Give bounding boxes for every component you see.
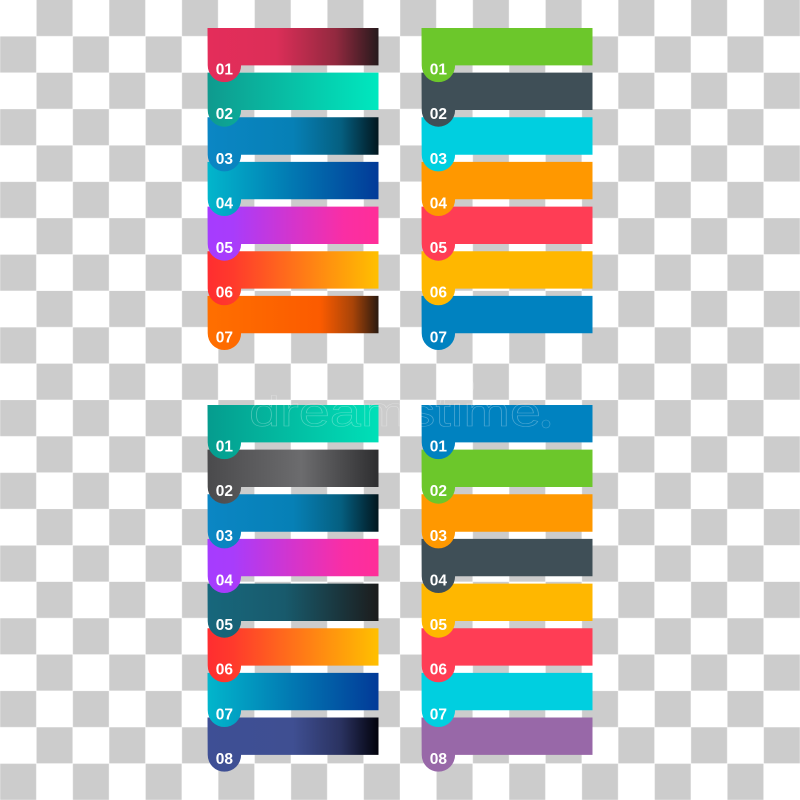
banner 07: 07 — [216, 329, 233, 346]
banner 01: 01 — [216, 62, 233, 78]
banner 02: 02 — [430, 106, 447, 123]
banner 05 — [422, 207, 592, 261]
banner 01 — [422, 405, 592, 459]
banner 04: 04 — [216, 572, 233, 589]
banner 07 — [422, 673, 592, 727]
banner 06 — [208, 251, 378, 305]
banner 04: 04 — [430, 195, 447, 212]
banner 04 — [208, 162, 378, 216]
banner 03 — [208, 117, 378, 171]
banner 08: 08 — [430, 751, 447, 768]
banner 01: 01 — [430, 438, 447, 456]
banner 06: 06 — [430, 285, 447, 302]
banner 07 — [422, 296, 592, 350]
banner 06 — [208, 628, 378, 682]
banner 07: 07 — [216, 706, 233, 723]
banner 06 — [422, 251, 592, 305]
panel: gradient banners 01-08 — [208, 405, 378, 772]
banner 01 — [208, 405, 378, 459]
banner 05: 05 — [430, 617, 447, 634]
banner 05: 05 — [216, 617, 233, 634]
banner 03: 03 — [430, 151, 447, 168]
banner 01: 01 — [430, 62, 447, 78]
banner 04 — [208, 539, 378, 593]
watermark — [249, 374, 550, 435]
banner 04: 04 — [216, 195, 233, 212]
banner 02: 02 — [216, 106, 233, 123]
banner 07 — [208, 296, 378, 350]
banner 02: 02 — [216, 483, 233, 500]
banner 03 — [422, 117, 592, 171]
banner 05: 05 — [216, 240, 233, 257]
banner 04 — [422, 539, 592, 593]
panel: flat banners 01-07 — [422, 28, 592, 350]
banner 08 — [422, 718, 592, 772]
banner 05 — [422, 584, 592, 638]
banner 02 — [422, 450, 592, 504]
banner 06 — [422, 628, 592, 682]
banner 06: 06 — [430, 662, 447, 679]
banner 01: 01 — [216, 438, 233, 456]
banner 03: 03 — [216, 528, 233, 545]
banner 08 — [208, 718, 378, 772]
banner 06: 06 — [216, 662, 233, 679]
panel: gradient banners 01-07 — [208, 28, 378, 350]
banner 02 — [208, 73, 378, 127]
banner 05 — [208, 207, 378, 261]
banner 07 — [208, 673, 378, 727]
banner 01 — [422, 28, 592, 82]
banner 03: 03 — [430, 528, 447, 545]
banner 02 — [208, 450, 378, 504]
banner 03 — [208, 494, 378, 548]
banner 03: 03 — [216, 151, 233, 168]
banner 07: 07 — [430, 329, 447, 346]
banner 07: 07 — [430, 706, 447, 723]
banner 01 — [208, 28, 378, 82]
banner 03 — [422, 494, 592, 548]
banner 05 — [208, 584, 378, 638]
banner 04 — [422, 162, 592, 216]
banner 06: 06 — [216, 285, 233, 302]
panel: flat banners 01-08 — [422, 405, 592, 772]
banner 04: 04 — [430, 572, 447, 589]
banner 02: 02 — [430, 483, 447, 500]
banner 02 — [422, 73, 592, 127]
banner 08: 08 — [216, 751, 233, 768]
watermark: dreamstime — [249, 388, 541, 435]
banner 05: 05 — [430, 240, 447, 257]
